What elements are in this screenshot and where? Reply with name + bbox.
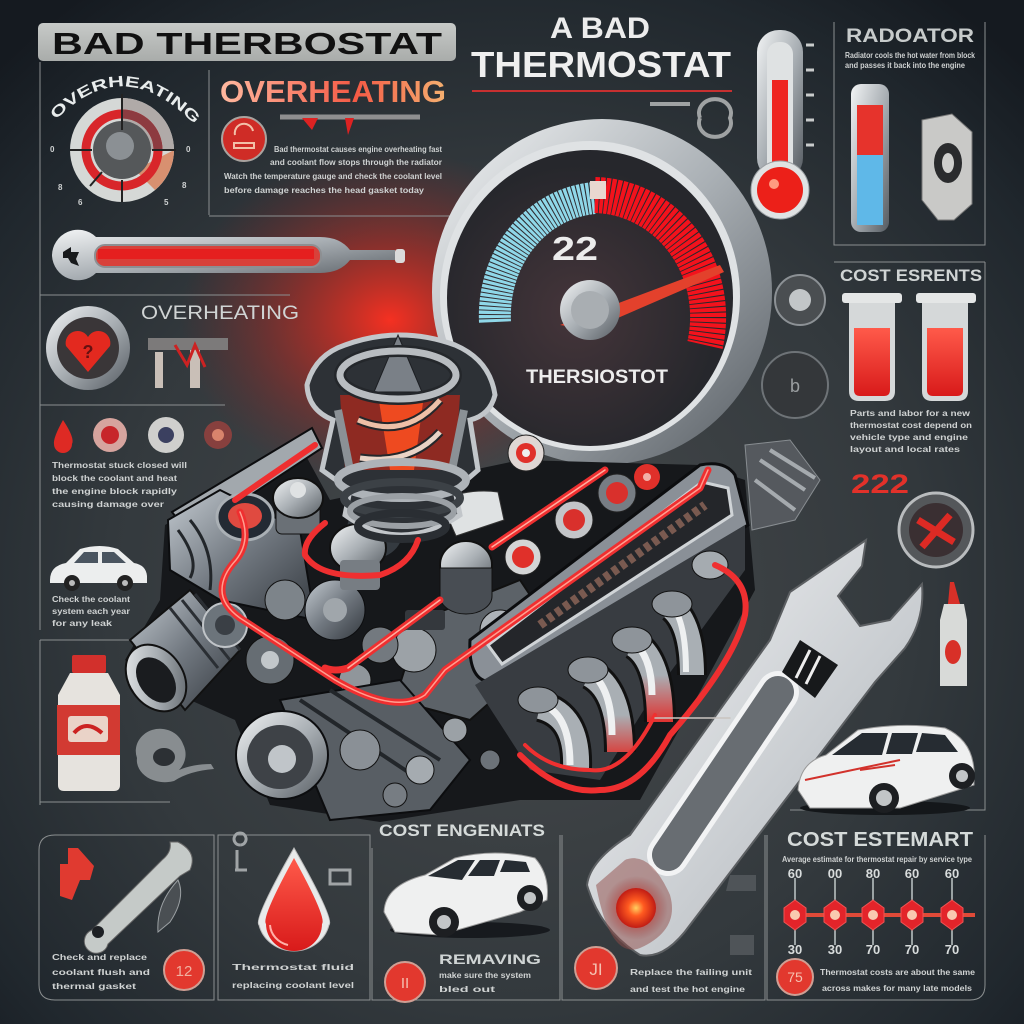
panel: radiator: RADOATOR [846, 26, 974, 47]
panel: car and remaining: make sure the system [439, 971, 531, 980]
large white car [798, 725, 975, 815]
large wrench [587, 540, 922, 956]
thermostat housing [307, 335, 495, 539]
panel: repair: and test the hot engine [630, 985, 746, 994]
panel: cost estimates: Parts and labor for a new [850, 409, 971, 418]
text block: left: the engine block rapidly [52, 487, 178, 496]
panel: cost estimate timeline: 80 [866, 866, 880, 881]
panel: cost estimate timeline: 60 [945, 866, 959, 881]
icon: small white car: Check the coolant [52, 595, 130, 604]
left cylinder block [168, 478, 403, 684]
panel: overheating dial: 8 [58, 183, 63, 192]
valve cover [470, 464, 748, 682]
icon: small white car: system each year [52, 607, 130, 616]
panel: cost estimate timeline: COST ESTEMART [787, 829, 973, 851]
panel: overheating warning: OVERHEATING [141, 303, 299, 324]
heading: a bad thermostat: A BAD [550, 12, 650, 45]
panel: overheating text [220, 74, 446, 195]
panel: repair: Replace the failing unit [630, 968, 752, 977]
panel: radiator [834, 22, 985, 245]
panel: cost estimates: 222 [851, 469, 909, 499]
big thermostat gauge [432, 119, 772, 465]
panel: cost estimate timeline: 60 [905, 866, 919, 881]
panel: cost estimate timeline: Thermostat costs are about the same [820, 968, 976, 977]
panel: overheating text: and coolant flow stops through the radiator [270, 158, 442, 167]
big thermostat gauge: 22 [552, 230, 598, 267]
panel: overheating text: before damage reaches the head gasket today [224, 186, 425, 195]
panel: overheating dial: 5 [164, 198, 169, 207]
panel: cost estimates: thermostat cost depend on [850, 421, 972, 430]
panel: cost estimate timeline: across makes for many late models [822, 984, 973, 993]
big thermostat gauge: THERSIOSTOT [526, 367, 668, 388]
panel: tools: Check and replace [52, 953, 148, 962]
intake pipe [113, 590, 247, 723]
panel: car and remaining: REMAVING [439, 951, 541, 967]
title bar [38, 23, 456, 61]
row of small icons [54, 417, 232, 453]
text block: left: block the coolant and heat [52, 474, 177, 483]
red coolant hoses [222, 445, 746, 791]
center parts [339, 435, 660, 720]
panel: overheating text: Bad thermostat causes engine overheating fast [274, 145, 442, 154]
panel: coolant bottle [40, 640, 170, 805]
panel: car and remaining: COST ENGENIATS [379, 821, 545, 840]
panel: cost estimate timeline: 30 [828, 942, 842, 957]
panel: cost estimate timeline: 70 [945, 942, 959, 957]
panel: car and remaining: bled out [439, 985, 496, 994]
panel: overheating warning [40, 295, 299, 630]
text block: left: Thermostat stuck closed will [52, 461, 187, 470]
panel: cost estimates: vehicle type and engine [850, 433, 969, 442]
panel: cost estimates: layout and local rates [850, 445, 961, 454]
panel: repair: JI [589, 960, 603, 979]
panel: overheating dial: 0 [186, 145, 191, 154]
title bar: BAD THERBOSTAT [52, 26, 442, 61]
icon: ring gasket [136, 729, 214, 782]
panel: overheating dial: 0 [50, 145, 55, 154]
panel: overheating dial: OVERHEATING [52, 76, 199, 122]
panel: radiator: Radiator cools the hot water from block [845, 51, 975, 60]
right side bracket [745, 440, 820, 530]
panel: cost estimate timeline: 60 [788, 866, 802, 881]
panel: overheating dial: 6 [78, 198, 83, 207]
icon: small white car: for any leak [52, 619, 113, 628]
panel: cost estimate timeline: 00 [828, 866, 842, 881]
panel: car and remaining: II [401, 975, 409, 992]
thermometer [751, 30, 814, 219]
panel: cost estimates [790, 262, 985, 810]
panel: coolant drop [218, 833, 370, 1000]
icon: sealant bottle [940, 582, 967, 686]
red glow [180, 150, 600, 490]
panel: cost estimate timeline: 70 [866, 942, 880, 957]
panel: radiator: and passes it back into the engine [845, 61, 965, 70]
panel: cost estimate timeline: Average estimate for thermostat repair by service type [782, 855, 973, 864]
engine silhouette [125, 445, 755, 822]
panel: car and remaining [372, 821, 560, 1002]
text block: left: causing damage over [52, 500, 164, 509]
panel: cost estimates: COST ESRENTS [840, 266, 982, 285]
panel: tools [39, 835, 214, 1000]
panel: tools: coolant flush and [52, 968, 150, 977]
panel: cost estimate timeline: 75 [787, 969, 803, 985]
upper left rail [172, 428, 322, 535]
text block: left [52, 461, 187, 509]
engine illustration [113, 335, 820, 822]
small dial icons: b [790, 376, 800, 396]
small dial icons [762, 275, 828, 418]
icon: small white car [50, 546, 147, 628]
icon: cost gauge [899, 493, 973, 567]
pulley [236, 680, 500, 820]
panel: overheating warning: ? [82, 342, 94, 362]
panel: coolant drop: replacing coolant level [232, 981, 354, 990]
panel: tools: 12 [176, 963, 192, 980]
panel: overheating dial [40, 62, 450, 295]
horizontal thermometer [52, 230, 405, 280]
panel: overheating dial: 8 [182, 181, 187, 190]
heading: a bad thermostat: THERMOSTAT [471, 44, 731, 85]
panel: cost estimate timeline: 70 [905, 942, 919, 957]
panel: overheating text: Watch the temperature gauge and check the coolant level [224, 172, 442, 181]
heading: a bad thermostat [471, 12, 732, 137]
panel: tools: thermal gasket [52, 982, 136, 991]
panel: overheating text: OVERHEATING [220, 74, 446, 109]
panel: cost estimate timeline [767, 829, 985, 1000]
panel: repair [562, 835, 765, 1000]
panel: cost estimate timeline: 30 [788, 942, 802, 957]
panel: coolant drop: Thermostat fluid [232, 963, 354, 972]
exhaust block and runners [475, 525, 745, 780]
